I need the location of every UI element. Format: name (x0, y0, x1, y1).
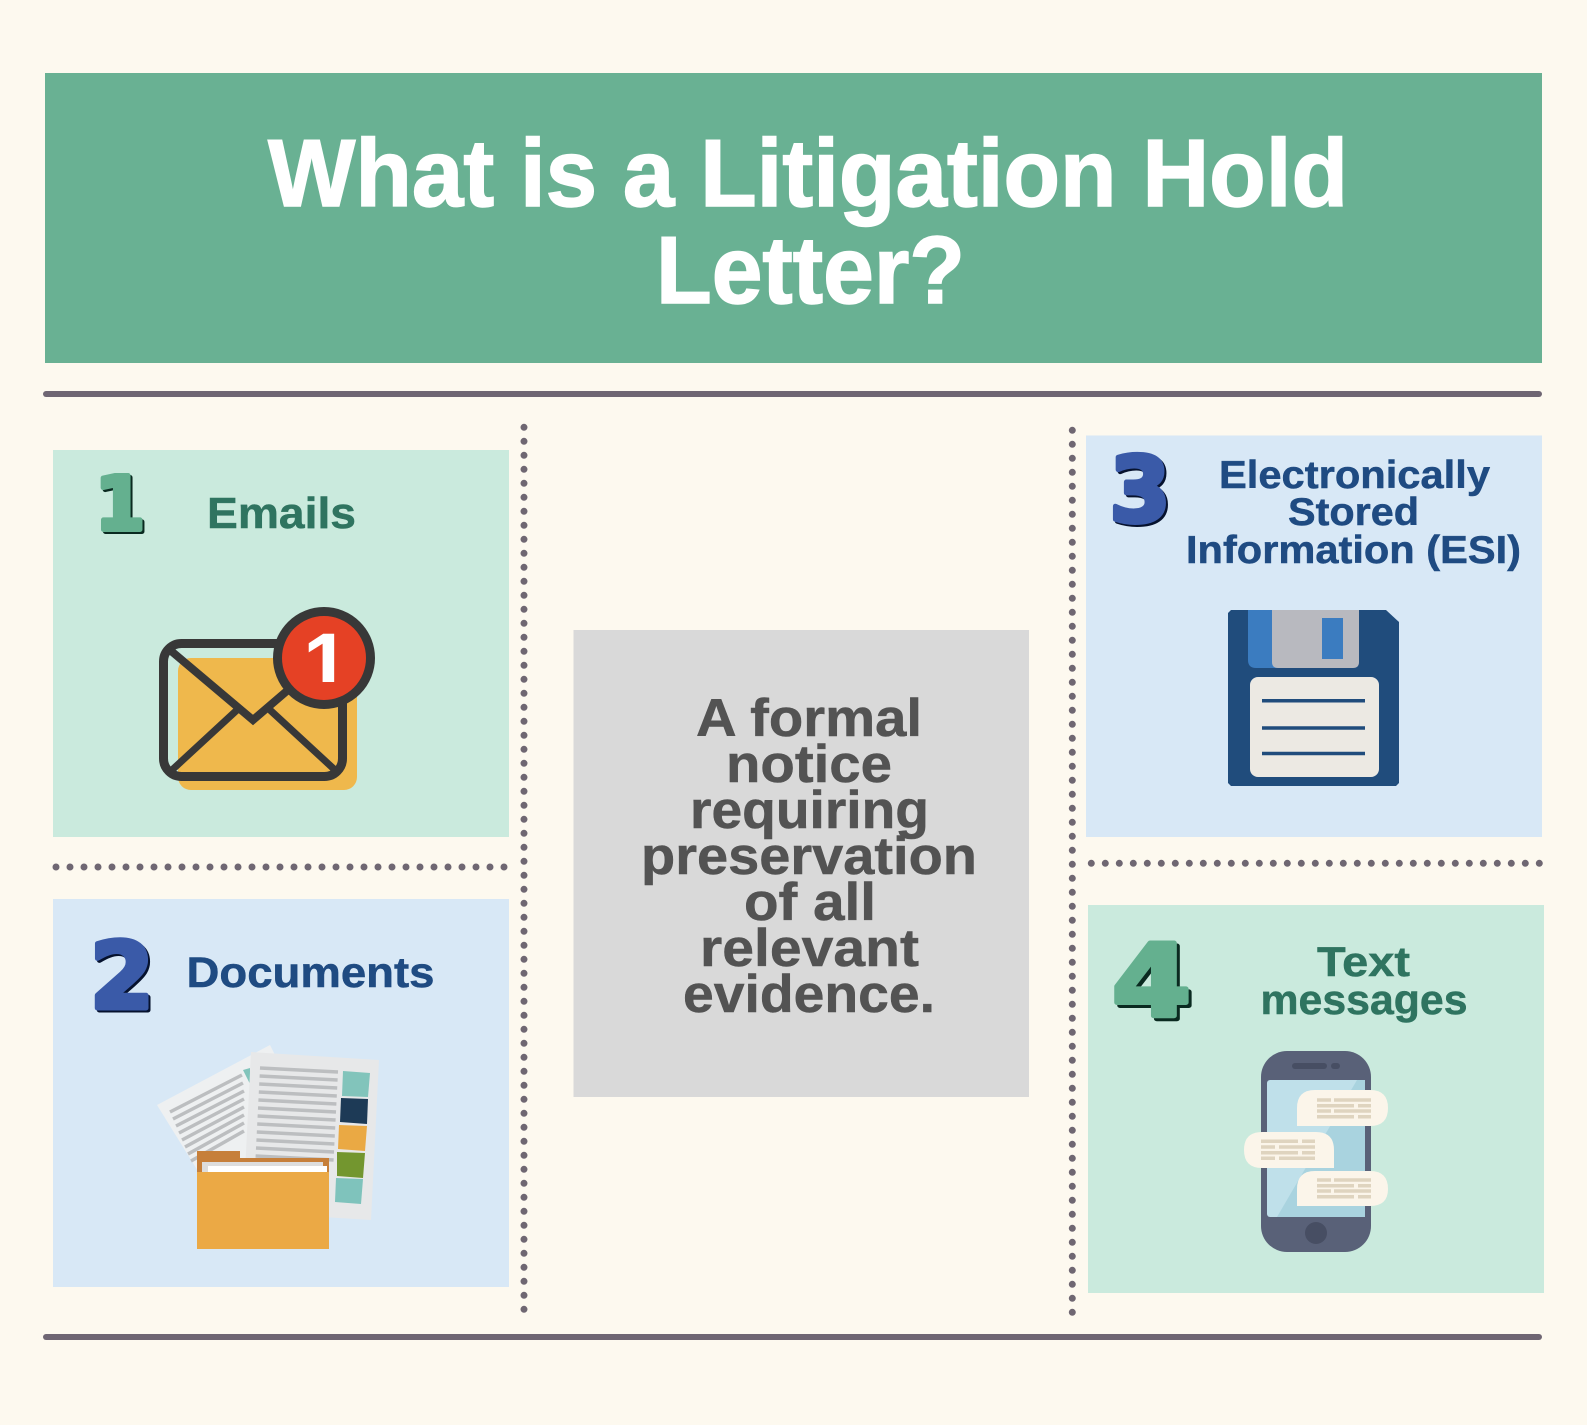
icon: floppy disk (1228, 610, 1399, 786)
icon: envelope with notification: 1 (303, 616, 350, 710)
panel: documents (53, 899, 509, 1287)
title: What is a Litigation Hold (268, 120, 1348, 227)
title: Letter? (656, 217, 965, 324)
heading: ESI: Stored (1288, 491, 1419, 534)
definition text: evidence. (683, 965, 935, 1024)
heading: text messages: messages (1260, 976, 1468, 1023)
heading: documents: Documents (186, 949, 434, 997)
icon: papers and folder (157, 1045, 379, 1249)
heading: text messages (1260, 938, 1468, 1023)
title (268, 120, 1348, 324)
title banner (45, 73, 1542, 363)
definition text: notice (726, 735, 892, 794)
number 4: 4 (1112, 923, 1191, 1040)
definition text: of all (744, 873, 876, 932)
definition text: A formal (696, 689, 922, 748)
heading: emails: Emails (207, 489, 356, 538)
definition text: requiring (690, 781, 929, 840)
panel: emails (53, 450, 509, 837)
panel: electronically stored information (1086, 436, 1542, 837)
definition text: preservation (641, 827, 977, 886)
number 2: 2 (90, 923, 154, 1030)
icon: phone with chat bubbles (1244, 1051, 1388, 1252)
heading: ESI: Electronically (1219, 454, 1490, 497)
definition text (641, 689, 977, 1024)
icon: envelope with notification (164, 612, 370, 790)
number 3: 3 (1110, 438, 1170, 543)
heading: ESI: Information (ESI) (1186, 529, 1521, 572)
heading: text messages: Text (1317, 938, 1410, 985)
panel: definition (574, 630, 1029, 1097)
definition text: relevant (700, 919, 919, 978)
panel: text messages (1088, 905, 1544, 1293)
heading: ESI (1186, 454, 1521, 572)
number 1: 1 (95, 462, 145, 548)
